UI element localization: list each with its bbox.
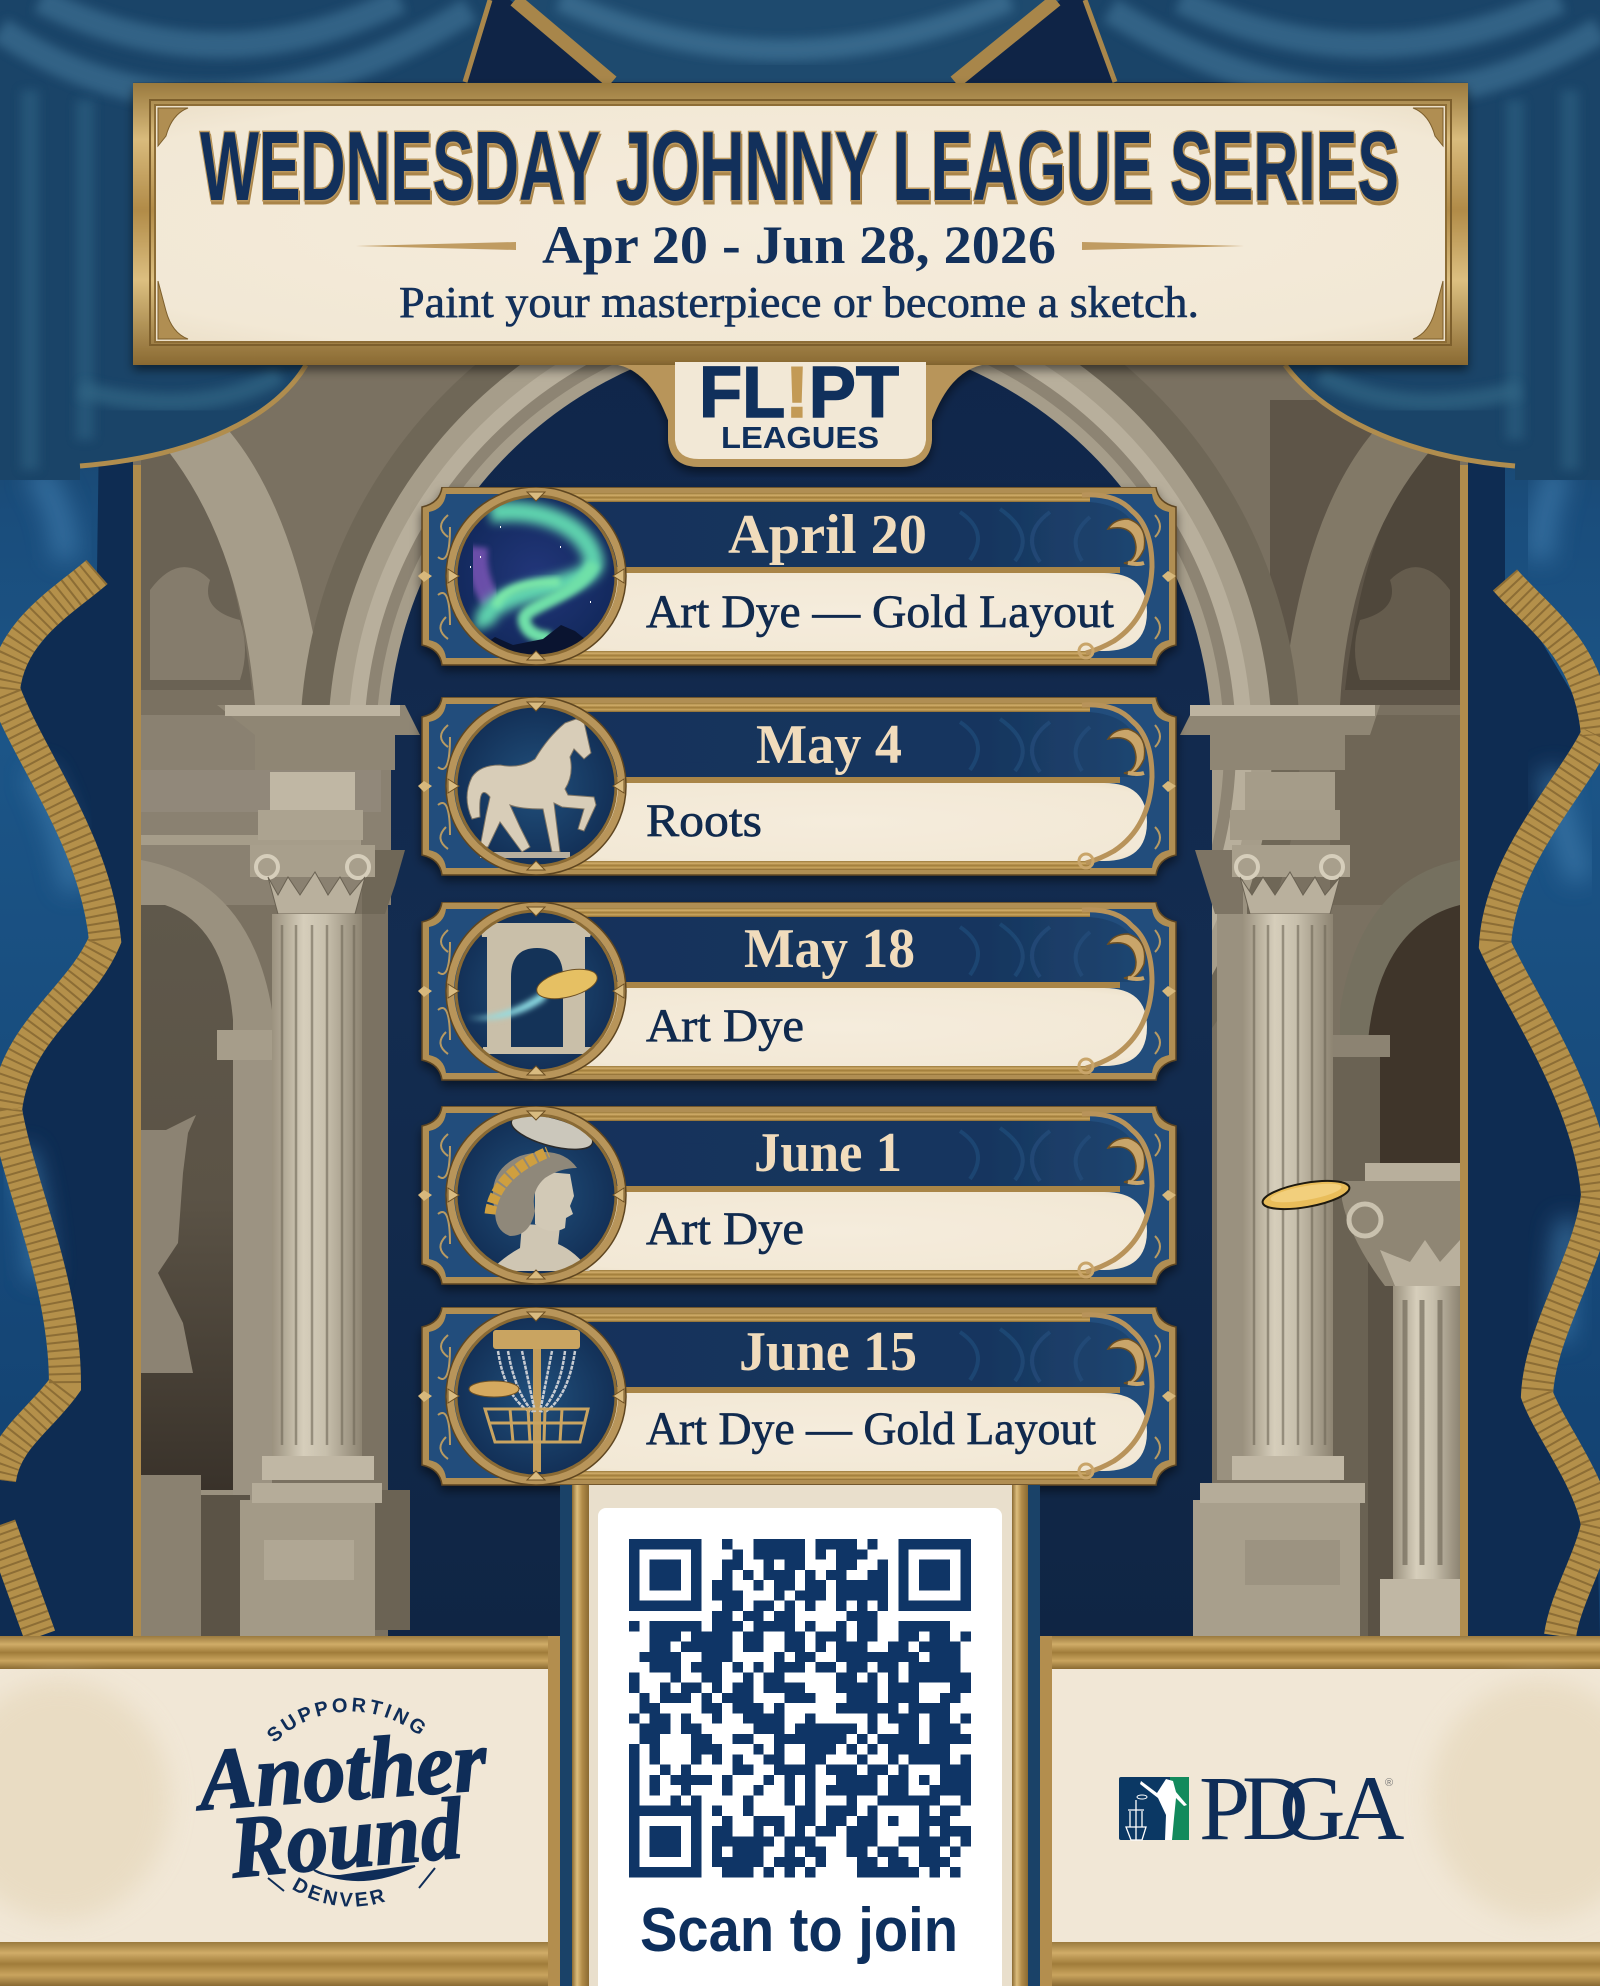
frame corner ornaments bbox=[158, 108, 1443, 339]
qr code bbox=[629, 1544, 971, 1872]
flipt leagues plaque bbox=[618, 353, 982, 467]
scan caption: Scan to join bbox=[640, 1896, 958, 1965]
right rule bbox=[1082, 242, 1244, 250]
schedule row: May 18 bbox=[418, 902, 1176, 1080]
right column bbox=[1180, 705, 1380, 1636]
icon: aurora bbox=[446, 487, 626, 665]
schedule row: June 1 bbox=[418, 1106, 1176, 1284]
registered mark: ® bbox=[1385, 1777, 1393, 1789]
panel: right partner bbox=[1040, 1636, 1600, 1986]
flipt wordmark: FL!PT bbox=[699, 353, 899, 433]
right entablature and niche bbox=[1330, 715, 1460, 1640]
icon: laurel bust bbox=[446, 1106, 626, 1284]
left vault and lunette bbox=[141, 432, 313, 705]
swoosh bbox=[314, 1866, 415, 1880]
icon: arch and disc bbox=[446, 902, 626, 1080]
left curtain bbox=[0, 360, 133, 1640]
date: May 4 bbox=[756, 714, 902, 776]
gold stage posts bbox=[133, 465, 1468, 1640]
schedule row: May 4 bbox=[418, 697, 1176, 875]
title panel bbox=[133, 83, 1468, 365]
small right column bbox=[1342, 1163, 1460, 1636]
round script: Round bbox=[225, 1780, 468, 1897]
schedule row: June 15 bbox=[418, 1307, 1176, 1485]
supporting arc text: SUPPORTING bbox=[268, 1698, 425, 1742]
side ticks bbox=[268, 1868, 435, 1891]
top valance bbox=[0, 0, 1600, 480]
left entablature and niche bbox=[141, 715, 391, 1640]
date: May 18 bbox=[744, 918, 915, 980]
tagline: Paint your masterpiece or become a sketch. bbox=[399, 278, 1199, 327]
event name: Art Dye — Gold Layout bbox=[646, 586, 1114, 638]
schedule row: April 20 bbox=[418, 487, 1176, 665]
event name: Art Dye bbox=[646, 1203, 804, 1255]
stage architecture bbox=[133, 245, 1468, 1640]
white card bbox=[598, 1508, 1002, 1986]
logo: pdga mark bbox=[1119, 1777, 1189, 1840]
date: June 15 bbox=[739, 1321, 917, 1383]
logo: another round denver bbox=[191, 1698, 490, 1907]
event name: Art Dye bbox=[646, 1000, 804, 1052]
right curtain bbox=[1468, 360, 1600, 1640]
panel: qr column bbox=[560, 1485, 1040, 1986]
date: April 20 bbox=[728, 504, 927, 566]
pdga wordmark: PDGA bbox=[1199, 1757, 1404, 1859]
event name: Art Dye — Gold Layout bbox=[646, 1403, 1096, 1455]
right vault and lunette bbox=[1270, 380, 1460, 705]
flying gold disc bbox=[1261, 1176, 1351, 1214]
panel: left supporter bbox=[0, 1636, 560, 1986]
icon: disc golf basket bbox=[446, 1307, 626, 1485]
icon: horse statue bbox=[446, 697, 626, 875]
left column bbox=[217, 705, 420, 1640]
date: June 1 bbox=[754, 1122, 902, 1184]
another script: Another bbox=[191, 1713, 490, 1830]
leagues wordmark: LEAGUES bbox=[721, 420, 879, 455]
denver arc text: DENVER bbox=[292, 1877, 386, 1907]
event name: Roots bbox=[646, 795, 762, 847]
date range: Apr 20 - Jun 28, 2026 bbox=[542, 215, 1056, 275]
central arch bbox=[300, 245, 1300, 1640]
left rule bbox=[356, 242, 516, 250]
